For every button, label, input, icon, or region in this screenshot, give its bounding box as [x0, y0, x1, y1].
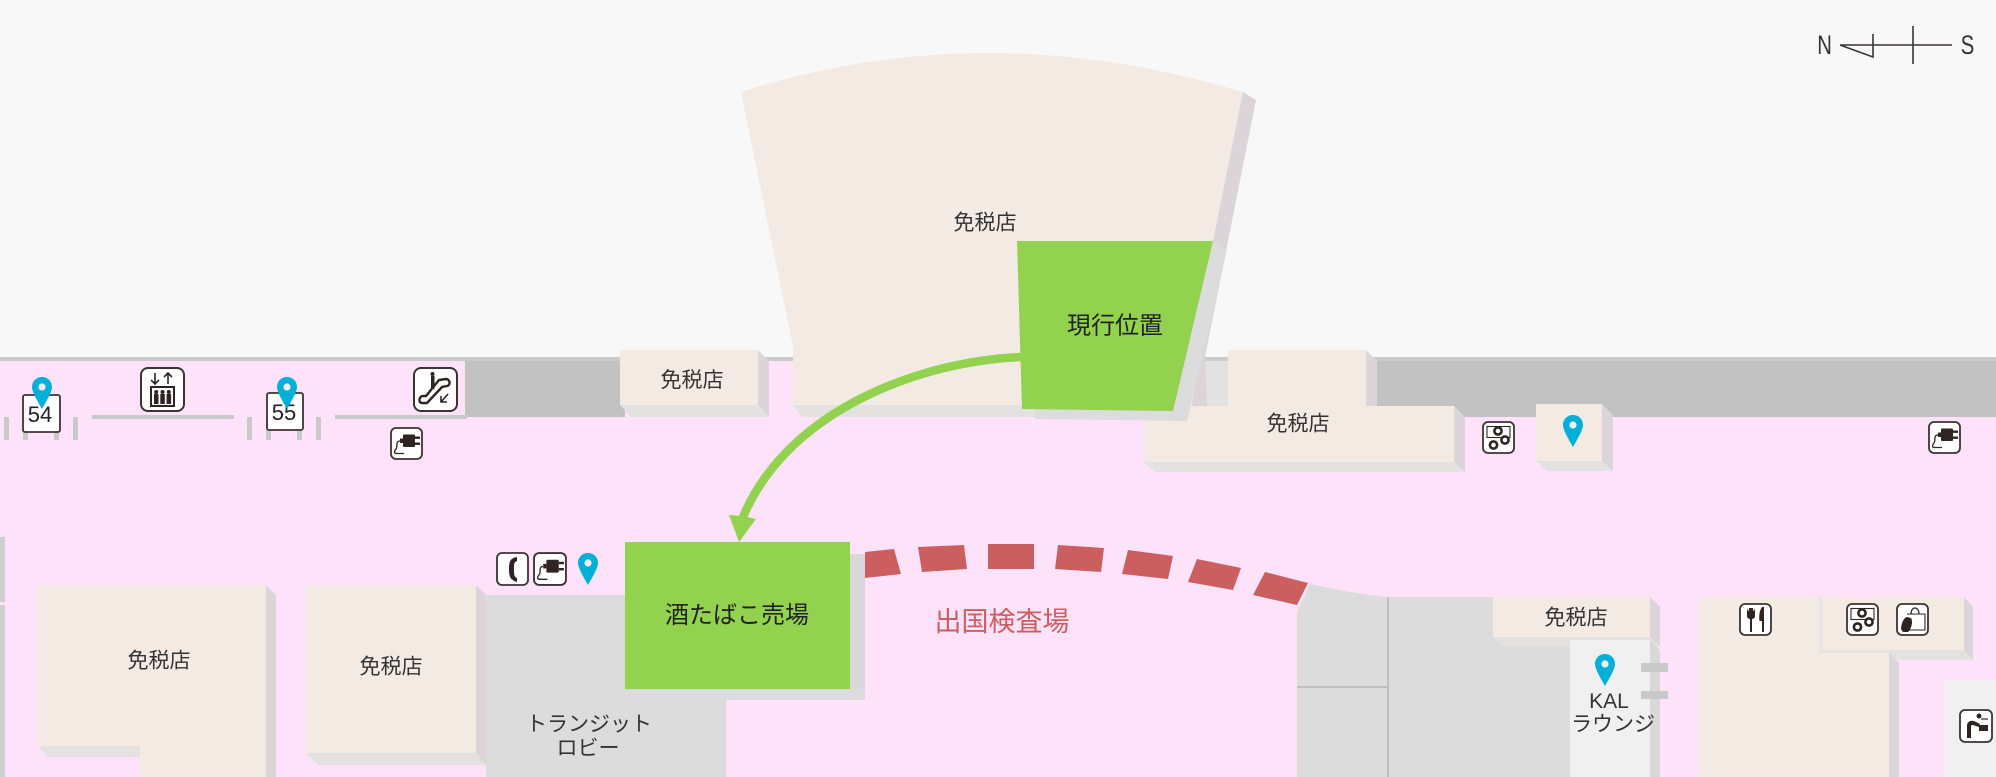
shop: pin block [1536, 404, 1613, 471]
label: 免税店 [1266, 412, 1330, 436]
current location highlight [1017, 241, 1213, 411]
immigration label: 出国検査場 [934, 607, 1070, 637]
icon: plug lobby [534, 553, 566, 585]
upper wall line [0, 357, 1996, 361]
label: 免税店 [1544, 606, 1608, 630]
shop: large fan shaped [741, 53, 1256, 417]
icon: exchange [1483, 422, 1514, 453]
shop: right [1699, 597, 1973, 777]
duty-free liquor and tobacco shadow [840, 554, 865, 700]
pink concourse floor [0, 360, 1996, 777]
icon: phone [497, 553, 528, 585]
lounge label 2: ラウンジ [1571, 713, 1655, 736]
transit lobby label [526, 713, 652, 760]
gate 55 sign [267, 393, 303, 430]
immigration dashed boundary [865, 544, 1308, 605]
icon: plug east [1929, 422, 1960, 453]
label: 免税店 [660, 369, 724, 392]
grey band left [465, 361, 625, 417]
icon: escalator [414, 368, 457, 411]
shop: small 免税店 [620, 350, 769, 417]
wall segment [335, 415, 467, 419]
pin KAL lounge [1595, 654, 1615, 686]
label: 免税店 [954, 212, 1016, 234]
icon: shopping bag [1897, 604, 1928, 635]
pin gate 55 [277, 377, 297, 409]
pin lobby [578, 553, 598, 585]
icon: elevator [141, 368, 184, 411]
relocation arrow [729, 357, 1022, 542]
liquor and tobacco sales area [625, 542, 850, 689]
label: 酒たばこ売場 [665, 602, 809, 629]
label: 免税店 [128, 650, 190, 672]
transit lobby label: トランジット [526, 713, 652, 736]
shop: center right 免税店 [1144, 350, 1465, 472]
gate ticks 55 [247, 417, 321, 440]
wall segment [92, 415, 234, 419]
shop: lower 免税店 [1493, 597, 1660, 647]
lounge label: KAL [1589, 690, 1629, 713]
left edge shops [0, 537, 5, 777]
lounge bars [1641, 663, 1668, 699]
compass [1817, 26, 1974, 64]
icon: plug [391, 428, 422, 459]
compass: S [1961, 30, 1974, 61]
icon: drinking fountain [1960, 710, 1992, 742]
pin gate 54 [32, 377, 52, 409]
icon: restaurant [1740, 604, 1771, 635]
pin block [1563, 415, 1583, 447]
right room [1943, 680, 1996, 777]
grey band right [1377, 361, 1996, 417]
shop: left lower 1 [38, 585, 276, 777]
grey transit room [486, 595, 726, 777]
compass: N [1817, 30, 1832, 61]
shop: left lower 2 [306, 585, 486, 765]
gate ticks 54 [4, 417, 78, 440]
light grey gap [1200, 361, 1230, 407]
KAL lounge [1570, 640, 1668, 777]
gate 54 sign: 54 [28, 402, 52, 427]
gate 54 sign [23, 395, 60, 432]
shadow bottom [725, 689, 865, 700]
transit lobby label: ロビー [556, 737, 620, 760]
current location shadow [1035, 241, 1227, 421]
label: 免税店 [360, 656, 422, 678]
label: 現行位置 [1067, 312, 1163, 340]
icon: exchange right [1847, 604, 1878, 635]
gate 55 sign: 55 [272, 400, 296, 425]
grey room right [1297, 584, 1570, 777]
